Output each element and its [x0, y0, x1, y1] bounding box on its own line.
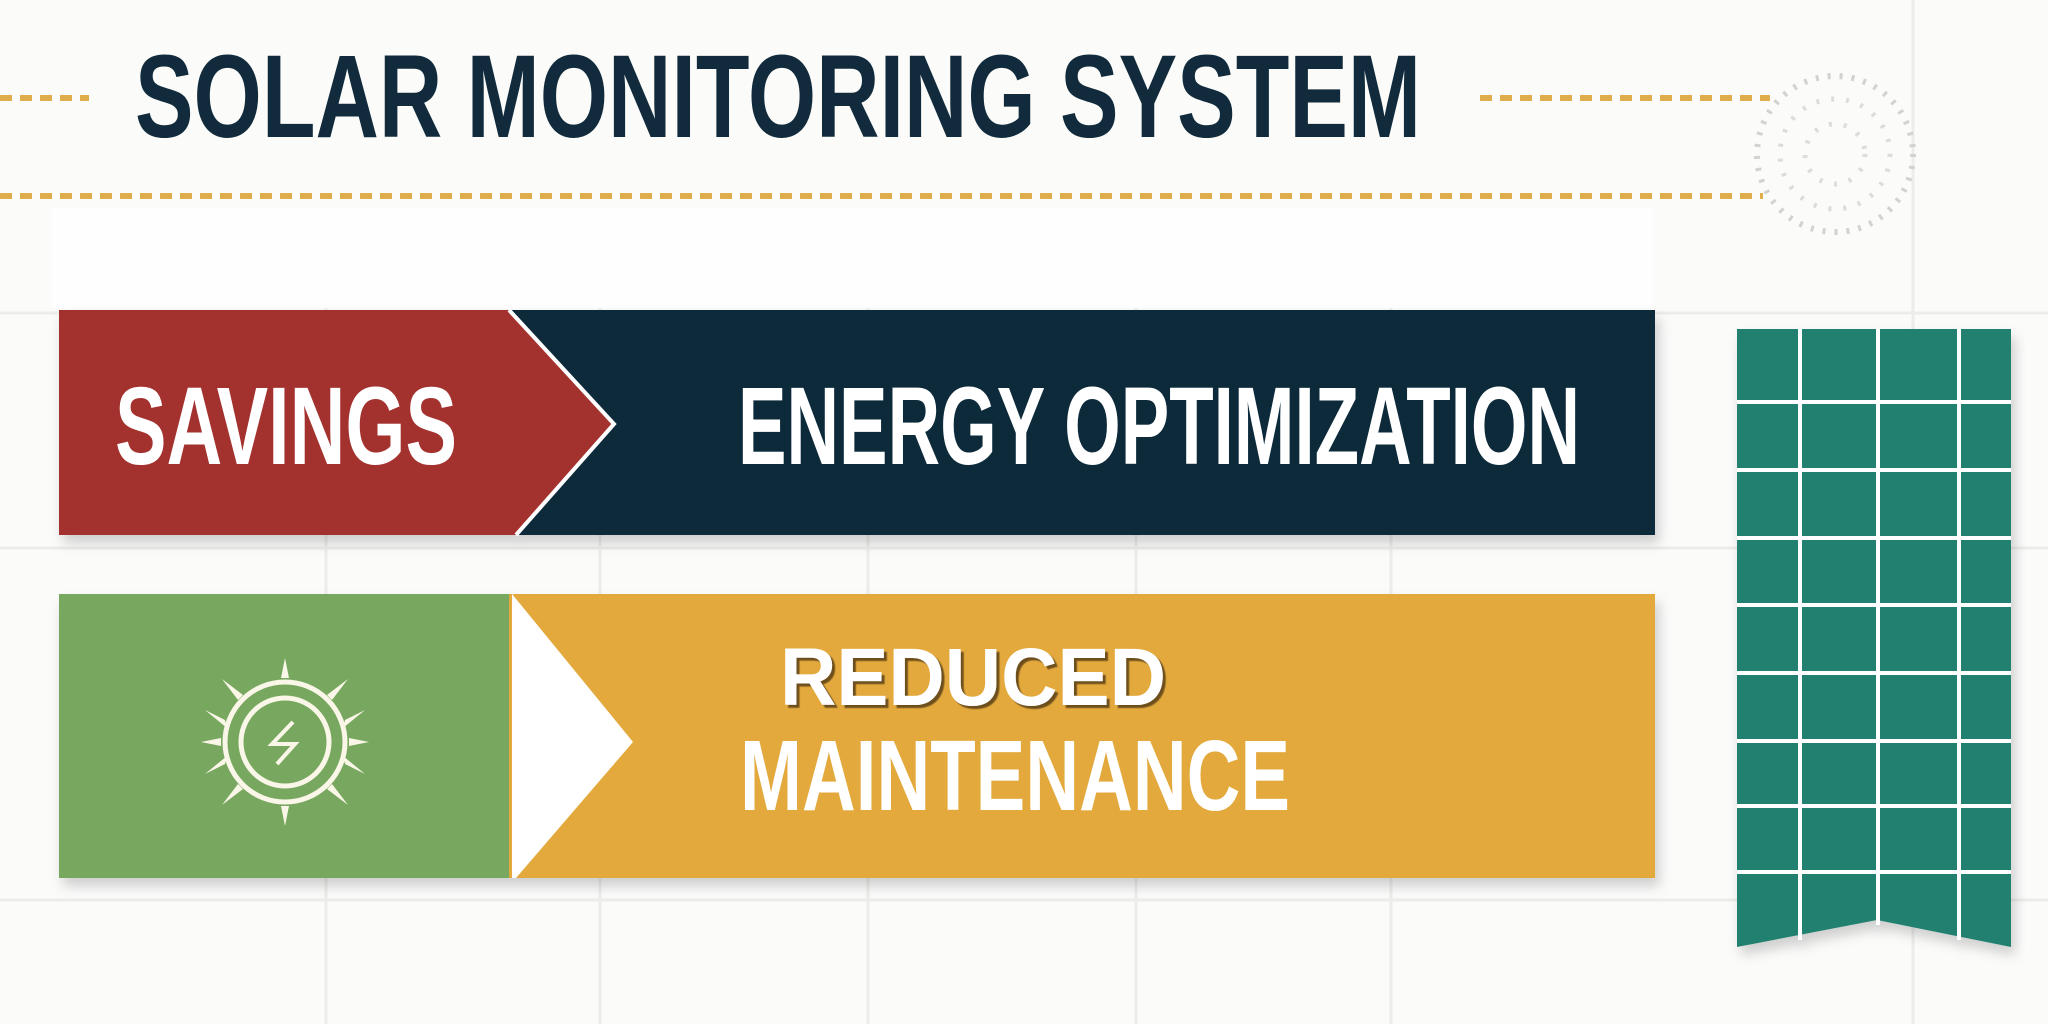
- panel: savings / energy optimization: [59, 310, 1655, 535]
- dotted circle: [1757, 76, 1913, 232]
- solar panel banner: [1737, 329, 2011, 947]
- reduced label: REDUCED: [780, 632, 1166, 723]
- maintenance label: MAINTENANCE: [740, 720, 1290, 832]
- title: SOLAR MONITORING SYSTEM: [135, 31, 1421, 163]
- savings chevron: [59, 310, 614, 535]
- energy optimization label: ENERGY OPTIMIZATION: [738, 365, 1580, 488]
- white arrow: [512, 594, 633, 878]
- dashed rule: [0, 193, 1763, 199]
- panel: reduced maintenance: [59, 594, 1655, 878]
- icon: solar gear: [201, 658, 369, 826]
- savings label: SAVINGS: [115, 365, 457, 488]
- dashes right: [1480, 95, 1770, 101]
- dashes left: [0, 95, 89, 101]
